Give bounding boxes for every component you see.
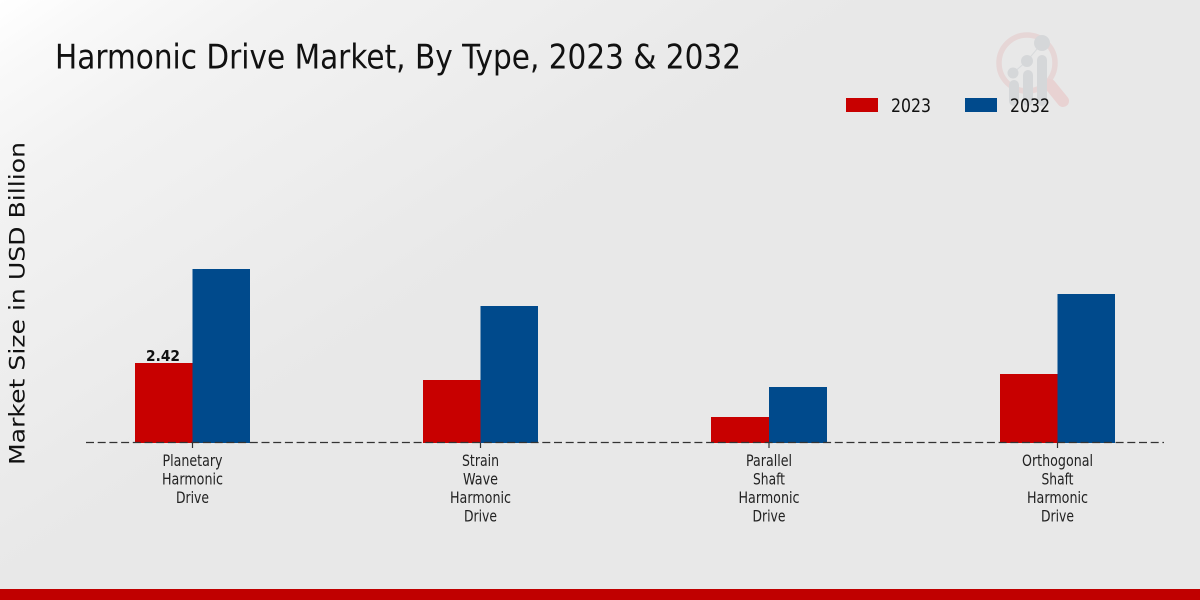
x axis baseline — [86, 442, 1164, 448]
category label: Strain Wave Harmonic Drive: Wave — [463, 470, 498, 488]
watermark logo icon — [999, 35, 1063, 106]
category label: Planetary Harmonic Drive: Planetary — [162, 451, 222, 470]
category label: Orthogonal Shaft Harmonic Drive: Drive — [1041, 507, 1074, 526]
category label: Parallel Shaft Harmonic Drive: Parallel — [746, 451, 792, 470]
category label: Orthogonal Shaft Harmonic Drive: Orthogonal — [1022, 451, 1093, 470]
data label: 2.42: 2.42 — [146, 347, 180, 365]
category label: Planetary Harmonic Drive — [162, 451, 223, 507]
legend item: 2032 — [965, 95, 1050, 117]
title: Harmonic Drive Market, By Type, 2023 & 2032 — [55, 38, 741, 78]
category label: Parallel Shaft Harmonic Drive: Shaft — [753, 470, 785, 488]
category label: Orthogonal Shaft Harmonic Drive: Harmonic — [1027, 488, 1088, 507]
bars: Orthogonal Shaft Harmonic Drive — [1000, 294, 1115, 443]
category label: Orthogonal Shaft Harmonic Drive — [1022, 451, 1093, 526]
category label: Strain Wave Harmonic Drive: Drive — [464, 507, 497, 526]
y axis label: Market Size in USD Billion — [6, 142, 30, 465]
legend item: 2023: 2023 — [891, 95, 931, 117]
bars: Planetary Harmonic Drive — [135, 269, 250, 443]
category label: Planetary Harmonic Drive: Harmonic — [162, 470, 223, 488]
bars: Strain Wave Harmonic Drive — [423, 306, 538, 443]
category label: Planetary Harmonic Drive: Drive — [176, 488, 209, 507]
bars: Parallel Shaft Harmonic Drive — [711, 387, 827, 443]
legend item: 2032: 2032 — [1010, 95, 1050, 117]
category label: Strain Wave Harmonic Drive: Harmonic — [450, 488, 511, 507]
footer bar — [0, 589, 1200, 600]
legend — [846, 95, 1050, 117]
category label: Parallel Shaft Harmonic Drive — [738, 451, 800, 526]
category label: Parallel Shaft Harmonic Drive: Drive — [752, 507, 786, 526]
category label: Strain Wave Harmonic Drive — [450, 451, 511, 526]
category label: Orthogonal Shaft Harmonic Drive: Shaft — [1042, 470, 1074, 488]
category label: Strain Wave Harmonic Drive: Strain — [462, 451, 499, 470]
legend item: 2023 — [846, 95, 931, 117]
category label: Parallel Shaft Harmonic Drive: Harmonic — [738, 488, 800, 507]
